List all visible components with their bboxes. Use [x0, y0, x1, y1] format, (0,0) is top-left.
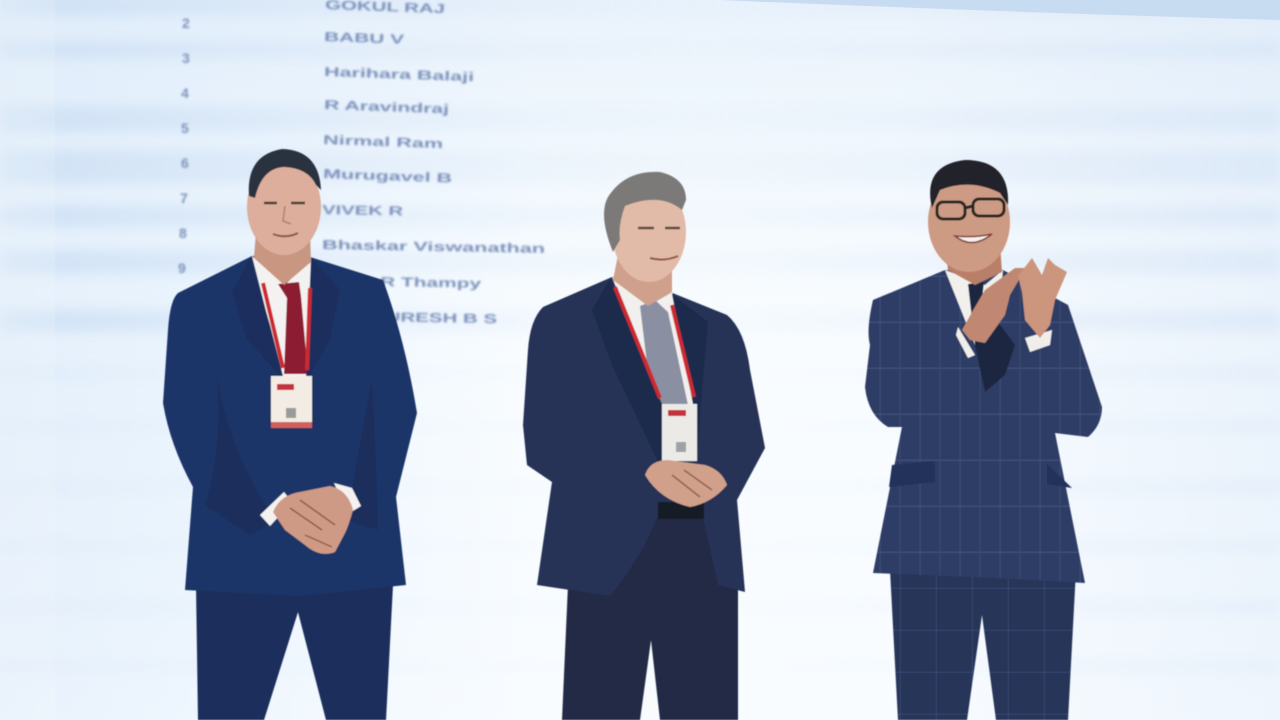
screen list of names: Bhaskar Viswanathan	[322, 237, 545, 256]
screen list of names: BABU V	[324, 29, 405, 47]
neck	[254, 232, 311, 285]
shirt	[252, 256, 311, 378]
screen list of names: 8	[179, 225, 187, 241]
lapels	[232, 258, 340, 382]
screen list of names: Harihara Balaji	[324, 64, 474, 84]
trousers	[890, 570, 1076, 720]
screen list of names: 2	[182, 15, 190, 31]
trousers	[562, 505, 738, 720]
tie	[278, 282, 308, 374]
person: middle man in dark suit	[523, 172, 765, 720]
hands clapping	[956, 258, 1067, 358]
head	[247, 159, 321, 255]
belt	[658, 502, 704, 519]
screen list of names: R Aravindraj	[324, 97, 449, 116]
head	[612, 182, 686, 282]
screen list of names: 4	[181, 85, 189, 101]
hair	[930, 160, 1008, 208]
jacket	[523, 277, 765, 596]
hands	[273, 486, 353, 554]
screen list of names	[178, 0, 545, 326]
screen list of names: 3	[182, 50, 190, 66]
person: right man in checked suit, clapping	[865, 160, 1102, 720]
face details	[638, 228, 680, 260]
trousers	[196, 585, 393, 720]
hands	[645, 460, 727, 507]
hair	[604, 172, 686, 252]
screen list of names: R Thampy	[380, 274, 482, 291]
jacket	[163, 256, 417, 596]
hair	[249, 149, 321, 198]
jacket	[865, 270, 1102, 583]
lanyard	[615, 287, 694, 398]
tie and chest shadow	[968, 282, 1015, 392]
person: left man in navy suit	[163, 149, 417, 720]
tie	[640, 300, 688, 405]
head	[928, 172, 1010, 272]
shirt	[945, 270, 1003, 345]
screen list of names: SURESH B S	[372, 309, 498, 326]
lapels	[592, 279, 708, 470]
screen list of names: 6	[181, 155, 189, 171]
screen list of names: VIVEK R	[322, 202, 404, 218]
screen list of names: 7	[180, 190, 188, 206]
badge	[271, 376, 312, 428]
neck	[945, 245, 1002, 285]
glasses	[937, 199, 1004, 219]
screen list of names: 9	[178, 260, 186, 276]
smile	[955, 234, 992, 243]
shirt	[612, 277, 693, 404]
screen list of names: Murugavel B	[323, 166, 452, 186]
lanyard	[263, 283, 310, 370]
pocket flaps	[889, 461, 1072, 488]
neck	[613, 255, 672, 306]
screen list of names: 5	[181, 120, 189, 136]
screen list of names: Nirmal Ram	[323, 132, 443, 151]
cuffs	[260, 483, 361, 526]
sleeve shading	[205, 360, 378, 535]
badge	[662, 404, 697, 461]
face details	[264, 203, 305, 236]
